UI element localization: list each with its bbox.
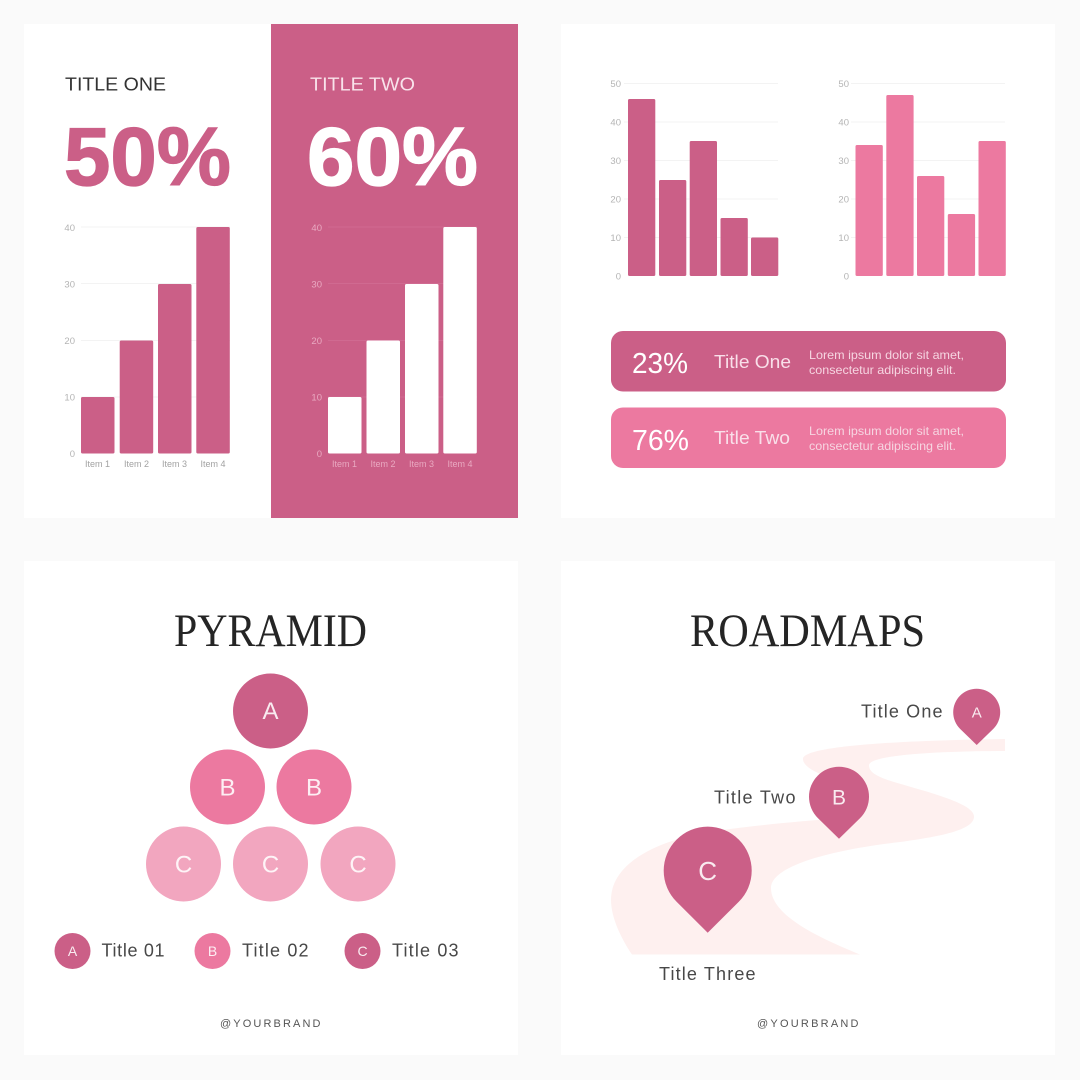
pin: A: A <box>972 704 982 722</box>
stat bar: 76% title two <box>611 408 1006 468</box>
brand handle: @YOURBRAND <box>220 1018 321 1030</box>
brand handle: @YOURBRAND <box>757 1018 859 1030</box>
legend: title 01: Title 01 <box>102 940 164 960</box>
pyramid diagram: B <box>219 774 236 802</box>
heading: pyramid: PYRAMID <box>174 605 367 657</box>
bar chart: title two: Item 3 <box>409 459 434 469</box>
bar chart: title two: 20 <box>311 336 322 347</box>
bar chart: right light pink <box>838 79 1006 282</box>
bar chart: right light pink: 30 <box>838 156 849 167</box>
pyramid diagram: C <box>349 852 367 878</box>
pin: B: B <box>832 786 846 810</box>
legend: title 03: Title 03 <box>392 940 458 960</box>
bar chart: title one: Item 2 <box>124 459 149 469</box>
legend: title 01: A <box>68 943 78 959</box>
bar chart: title two: 10 <box>311 392 322 404</box>
legend: title 03: C <box>357 943 368 959</box>
stat bar: 23% title one: Title One <box>714 352 791 372</box>
bar chart: right light pink: 10 <box>838 233 849 244</box>
panel: paired bar charts and stat bars <box>561 24 1055 518</box>
bar chart: title one: 0 <box>70 449 75 460</box>
stat bar: 76% title two: consectetur adipiscing elit. <box>809 439 956 453</box>
heading: roadmaps: ROADMAPS <box>690 605 925 657</box>
pin: C: C <box>698 856 717 886</box>
legend: title 02 <box>194 933 308 969</box>
bar chart: title two: Item 1 <box>332 459 357 469</box>
pin: B <box>809 767 869 839</box>
label: title two: Title Two <box>714 788 796 808</box>
bar chart: title one: Item 4 <box>200 459 226 469</box>
bar chart: right light pink: 50 <box>838 79 849 90</box>
heading: title one: TITLE ONE <box>65 74 166 94</box>
bar chart: right light pink: 40 <box>838 118 849 128</box>
bar chart: title two: 0 <box>317 449 322 460</box>
label: title three: Title Three <box>659 964 756 984</box>
bar chart: title two: 30 <box>311 280 322 290</box>
bar chart: title one <box>64 223 230 469</box>
bar chart: title one: Item 3 <box>162 459 187 469</box>
bar chart: title one: Item 1 <box>85 459 110 469</box>
bar chart: left dark pink: 40 <box>610 118 621 128</box>
legend: title 02: B <box>208 943 217 959</box>
stat bar: 76% title two: Lorem ipsum dolor sit amet, <box>809 424 964 438</box>
stat bar: 23% title one: consectetur adipiscing elit. <box>809 363 956 377</box>
pyramid diagram: A <box>262 698 279 725</box>
panel: roadmaps <box>561 561 1055 1055</box>
pin: C <box>664 827 752 933</box>
bar chart: title one: 10 <box>64 392 75 404</box>
pyramid diagram: B <box>306 774 322 802</box>
bar chart: title one: 30 <box>64 280 75 290</box>
stat bar: 23% title one: Lorem ipsum dolor sit amet, <box>809 348 964 362</box>
bar chart: left dark pink <box>610 79 778 282</box>
bar chart: title one: 20 <box>64 336 75 347</box>
panel: title one and title two bar charts <box>24 24 518 518</box>
bar chart: left dark pink: 10 <box>610 233 621 244</box>
stat bar: 23% title one: 23% <box>632 348 688 380</box>
statistic: 50%: 50% <box>64 110 231 203</box>
bar chart: title two: 40 <box>311 223 322 234</box>
bar chart: left dark pink: 0 <box>616 272 621 282</box>
heading: title two: TITLE TWO <box>310 74 415 94</box>
pin: A <box>953 689 1000 745</box>
statistic: 60%: 60% <box>307 110 478 203</box>
legend: title 01 <box>54 933 164 969</box>
bar chart: title one: 40 <box>64 223 75 234</box>
bar chart: title two: Item 2 <box>370 459 396 469</box>
bar chart: title two <box>311 223 477 469</box>
label: title one: Title One <box>861 702 942 722</box>
bar chart: left dark pink: 50 <box>610 79 621 90</box>
stat bar: 23% title one <box>611 331 1006 392</box>
winding road <box>611 739 1005 954</box>
bar chart: right light pink: 0 <box>844 272 849 282</box>
pyramid diagram: C <box>175 852 192 878</box>
bar chart: left dark pink: 30 <box>610 156 621 167</box>
stat bar: 76% title two: Title Two <box>714 428 790 448</box>
pyramid diagram <box>146 674 396 902</box>
pyramid diagram: C <box>262 852 279 878</box>
legend: title 02: Title 02 <box>242 940 308 960</box>
stat bar: 76% title two: 76% <box>632 425 689 457</box>
bar chart: left dark pink: 20 <box>610 194 621 206</box>
bar chart: right light pink: 20 <box>838 194 849 206</box>
legend: title 03 <box>344 933 458 969</box>
bar chart: title two: Item 4 <box>447 459 473 469</box>
panel: pyramid <box>24 561 518 1055</box>
